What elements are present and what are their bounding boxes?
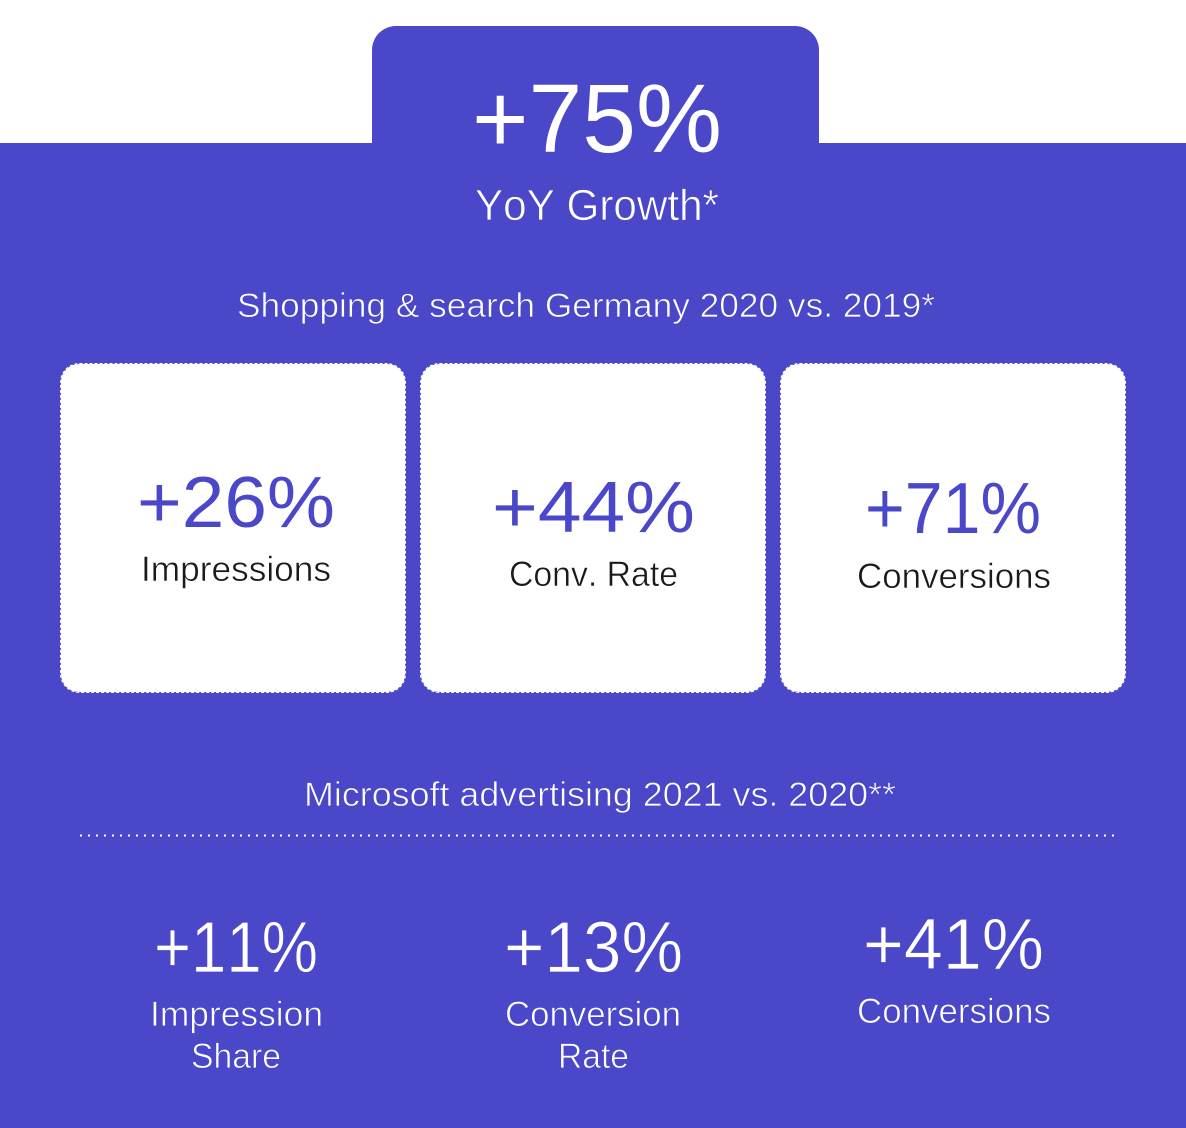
- label: conversions: Conversions: [857, 557, 1051, 596]
- stat: +11%: +11%: [154, 908, 318, 988]
- label: conversions: Conversions: [857, 992, 1051, 1031]
- headline label: YoY Growth*: [475, 181, 719, 230]
- label: conversion rate: Conversion: [505, 995, 681, 1034]
- section heading: shopping and search: Shopping & search Germany 2020 vs. 2019*: [237, 287, 935, 325]
- panel: conversions card: [780, 364, 1126, 692]
- label: conversion rate: [505, 995, 681, 1076]
- label: impressions: Impressions: [141, 550, 331, 589]
- stat group: conversion rate: [504, 908, 683, 1076]
- label: impression share: Share: [191, 1037, 281, 1076]
- section heading: microsoft advertising: Microsoft advertising 2021 vs. 2020**: [304, 776, 896, 814]
- stat: +44%: +44%: [492, 468, 695, 548]
- stat: +71%: +71%: [865, 469, 1041, 549]
- panel: impressions card: [60, 364, 406, 692]
- stat: +26%: +26%: [137, 463, 335, 543]
- label: conv. rate: Conv. Rate: [509, 555, 678, 594]
- label: conversion rate: Rate: [558, 1037, 629, 1076]
- headline stat: +75%: +75%: [472, 64, 722, 173]
- stat group: impression share: [150, 908, 323, 1076]
- label: impression share: Impression: [150, 995, 323, 1034]
- stat: +13%: +13%: [504, 908, 683, 988]
- label: impression share: [150, 995, 323, 1076]
- panel: conversion rate card: [420, 364, 766, 692]
- stat: +41%: +41%: [863, 905, 1044, 985]
- stat group: conversions: [857, 905, 1051, 1031]
